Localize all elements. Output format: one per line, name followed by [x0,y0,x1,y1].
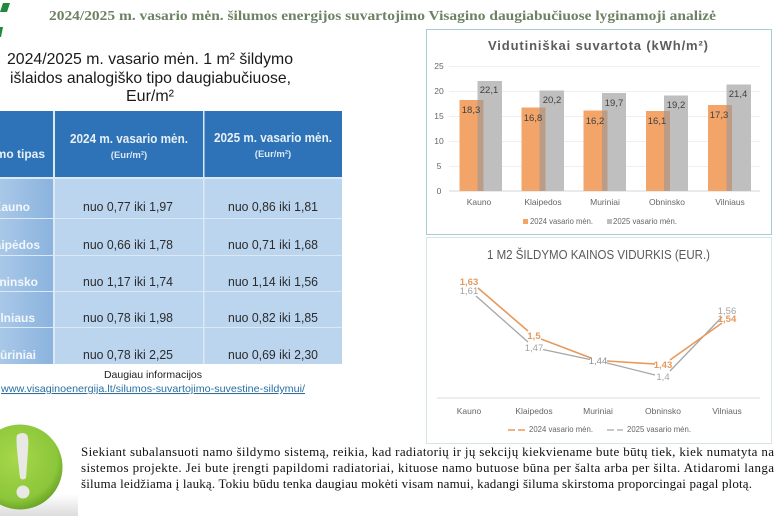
table header row [0,131,332,161]
bar chart axis: 0 [437,186,442,196]
bars: Vilniaus: Vilniaus [715,197,745,207]
bars: Obninsko: Obninsko [649,197,685,207]
body text: sistemos projekte. Jei bute įrengti papildomi radiatoriai, kituose namo butuose būna per šalta arba per šilta. Atidaromi langa [81,460,774,475]
table header row: (Eur/m²) [255,149,291,160]
bar chart axis: 25 [434,61,444,71]
line: 2024 vasario mėn. [478,288,722,364]
line chart categories: Klaipedos [515,406,553,416]
line data labels: 1,4 [656,372,670,383]
table row: Klaipėdos: nuo 0,66 iki 1,78 [83,238,173,252]
bars: Obninsko: 16,1 [648,116,666,127]
line data labels [460,277,737,383]
bars: Kauno: 18,3 [462,105,480,116]
bar chart title: Vidutiniškai suvartota (kWh/m²) [488,38,708,53]
line data labels: 1,56 [718,306,736,317]
table [0,111,342,364]
table header row: (Eur/m²) [111,150,147,161]
line data labels: 1,5 [527,331,541,342]
line: 2025 vasario mėn. [476,296,722,375]
table row: Klaipėdos [0,238,318,252]
bars: Vilniaus: 17,3 [710,110,728,121]
table row: Vilniaus: nuo 0,82 iki 1,85 [228,311,318,325]
bars: Kauno [460,81,502,207]
table row: Kauno [0,200,318,214]
table heading: 2024/2025 m. vasario mėn. 1 m² šildymo [7,51,293,68]
line chart axis [437,397,760,399]
bar chart axis: 5 [437,161,442,171]
more information link: Daugiau informacijos [104,369,202,381]
table row: Klaipėdos: nuo 0,71 iki 1,68 [228,238,318,252]
bar chart axis: 20 [434,86,444,96]
table row: Mūriniai: nuo 0,69 iki 2,30 [228,348,318,362]
body text: Siekiant subalansuoti namo šildymo sistemą, reikia, kad radiatorių ir jų sekcijų kiekviename bute būtų tiek, kiek numatyta na [81,444,774,459]
bars: Klaipedos: Klaipedos [524,197,562,207]
more information link: www.visaginoenergija.lt/silumos-suvartojimo-suvestine-sildymui/ [0,383,305,395]
line data labels: 1,61 [460,286,478,297]
line data labels: 1,43 [654,360,672,371]
bars: Klaipedos: 20,2 [543,95,561,106]
line chart title: 1 M2 ŠILDYMO KAINOS VIDURKIS (EUR.) [487,247,710,262]
line data labels: 1,44 [589,356,607,367]
line chart categories: Kauno [457,406,482,416]
bars: Muriniai: Muriniai [590,197,620,207]
title: 2024/2025 m. vasario mėn. šilumos energijos suvartojimo Visagino daugiabučiuose lyginamoji analizė [49,9,716,24]
panel: bar chart [426,30,772,234]
table row: Mūriniai: nuo 0,78 iki 2,25 [83,348,173,362]
line chart categories [457,406,742,416]
bars: Kauno: Kauno [467,197,492,207]
bars: Klaipedos [522,90,564,207]
body text [81,444,774,491]
bar chart axis: 10 [434,136,444,146]
body text: šiluma leidžiama į lauką. Tokiu būdu tenka daugiau mokėti visam namui, kadangi šiluma skirstoma proporcingai pagal plotą. [81,476,752,491]
panel: line chart [426,238,772,444]
table heading: išlaidos analogiško tipo daugiabučiuose, [10,70,291,87]
bar chart axis: 15 [434,111,444,121]
bars: Muriniai [584,93,626,207]
logo [0,3,10,37]
bars: Vilniaus [708,84,751,207]
line data labels: 1,47 [525,343,543,354]
bar chart legend: 2024 vasario mėn. [530,217,593,226]
line chart legend: 2024 vasario mėn. [529,425,593,434]
icon: green exclamation mark [0,424,78,516]
line chart categories: Vilniaus [712,406,742,416]
table heading [7,51,293,105]
bars: Vilniaus: 21,4 [729,89,747,100]
line chart legend [508,425,691,434]
line data labels: 1,54 [718,314,737,325]
bar chart legend [523,217,677,226]
bar chart axis [434,61,760,196]
table row: Obninsko [0,275,318,289]
line chart categories: Muriniai [583,406,613,416]
bars: Obninsko: 19,2 [667,100,685,111]
bars: Muriniai: 19,7 [605,98,623,109]
bar chart legend: 2025 vasario mėn. [613,217,677,226]
table header row: 2024 m. vasario mėn. [70,132,188,146]
table row: Obninsko: nuo 1,17 iki 1,74 [83,275,173,289]
bars: Klaipedos: 16,8 [524,113,542,124]
table row: Mūriniai [0,348,318,362]
bars: Kauno: 22,1 [480,85,498,96]
table row: Kauno: nuo 0,77 iki 1,97 [83,200,173,214]
bars: Obninsko [646,96,688,207]
line chart legend: 2025 vasario mėn. [627,425,691,434]
more information link [0,369,305,395]
table row: Kauno: nuo 0,86 iki 1,81 [228,200,318,214]
table header row: 2025 m. vasario mėn. [214,131,332,145]
table row: Vilniaus: nuo 0,78 iki 1,98 [83,311,173,325]
bars: Muriniai: 16,2 [586,116,604,127]
line data labels: 1,63 [460,277,478,288]
line chart categories: Obninsko [645,406,681,416]
table heading: Eur/m² [126,88,175,105]
table row: Obninsko: nuo 1,14 iki 1,56 [228,275,318,289]
table row: Vilniaus [0,311,318,325]
